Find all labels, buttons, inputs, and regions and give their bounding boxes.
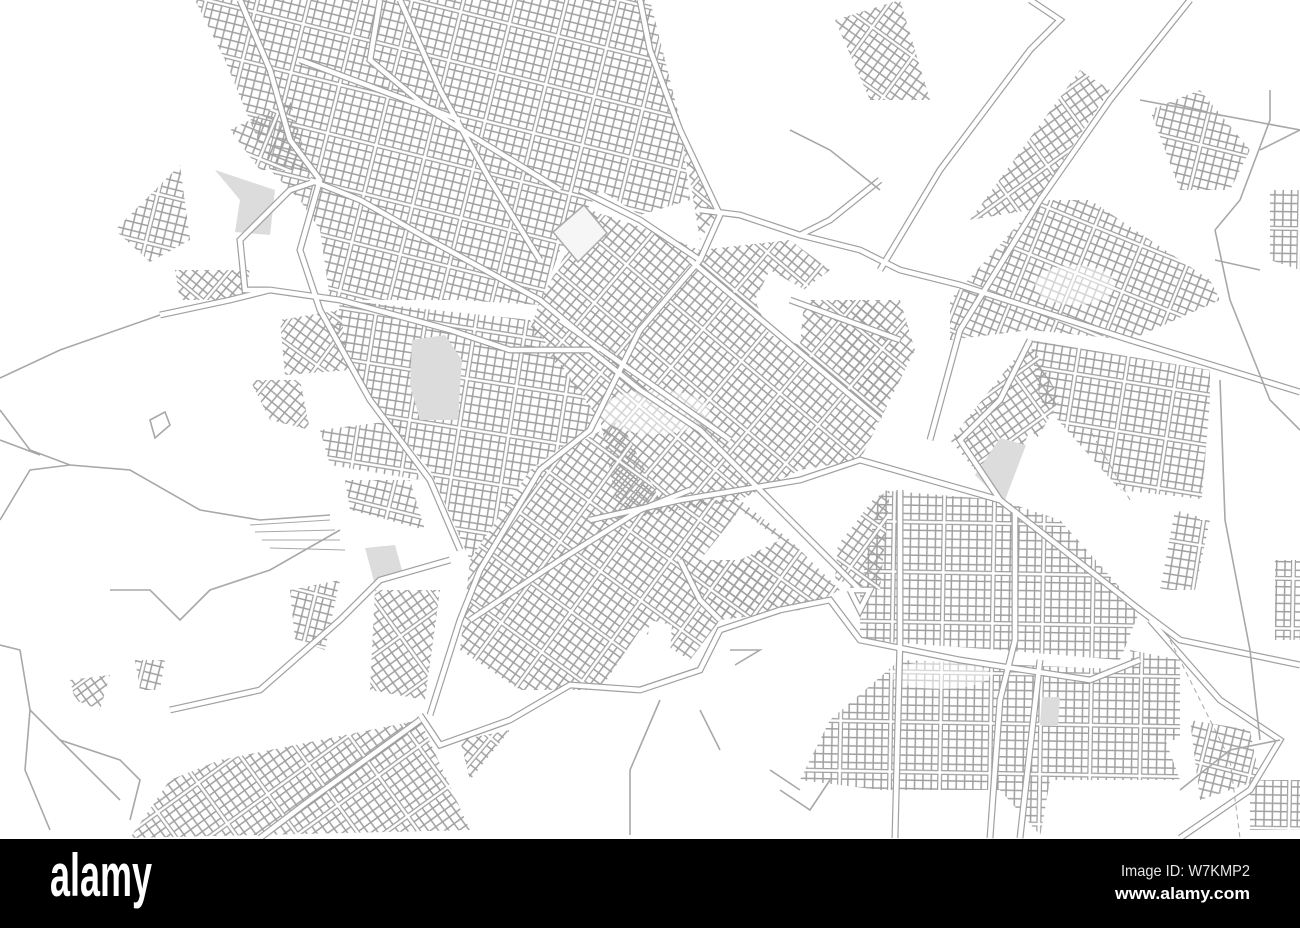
website: www.alamy.com: [1114, 884, 1250, 903]
alamy logo: alamy: [50, 842, 152, 909]
parks and stippled areas: [215, 170, 1060, 725]
empty block beside the centre: [553, 205, 607, 262]
footer bar: [0, 839, 1300, 928]
open land and gaps: [642, 270, 1225, 838]
faded city centre: [600, 265, 1115, 689]
major roads: [160, 0, 1300, 838]
image id: Image ID: W7KMP2: [1121, 863, 1250, 880]
